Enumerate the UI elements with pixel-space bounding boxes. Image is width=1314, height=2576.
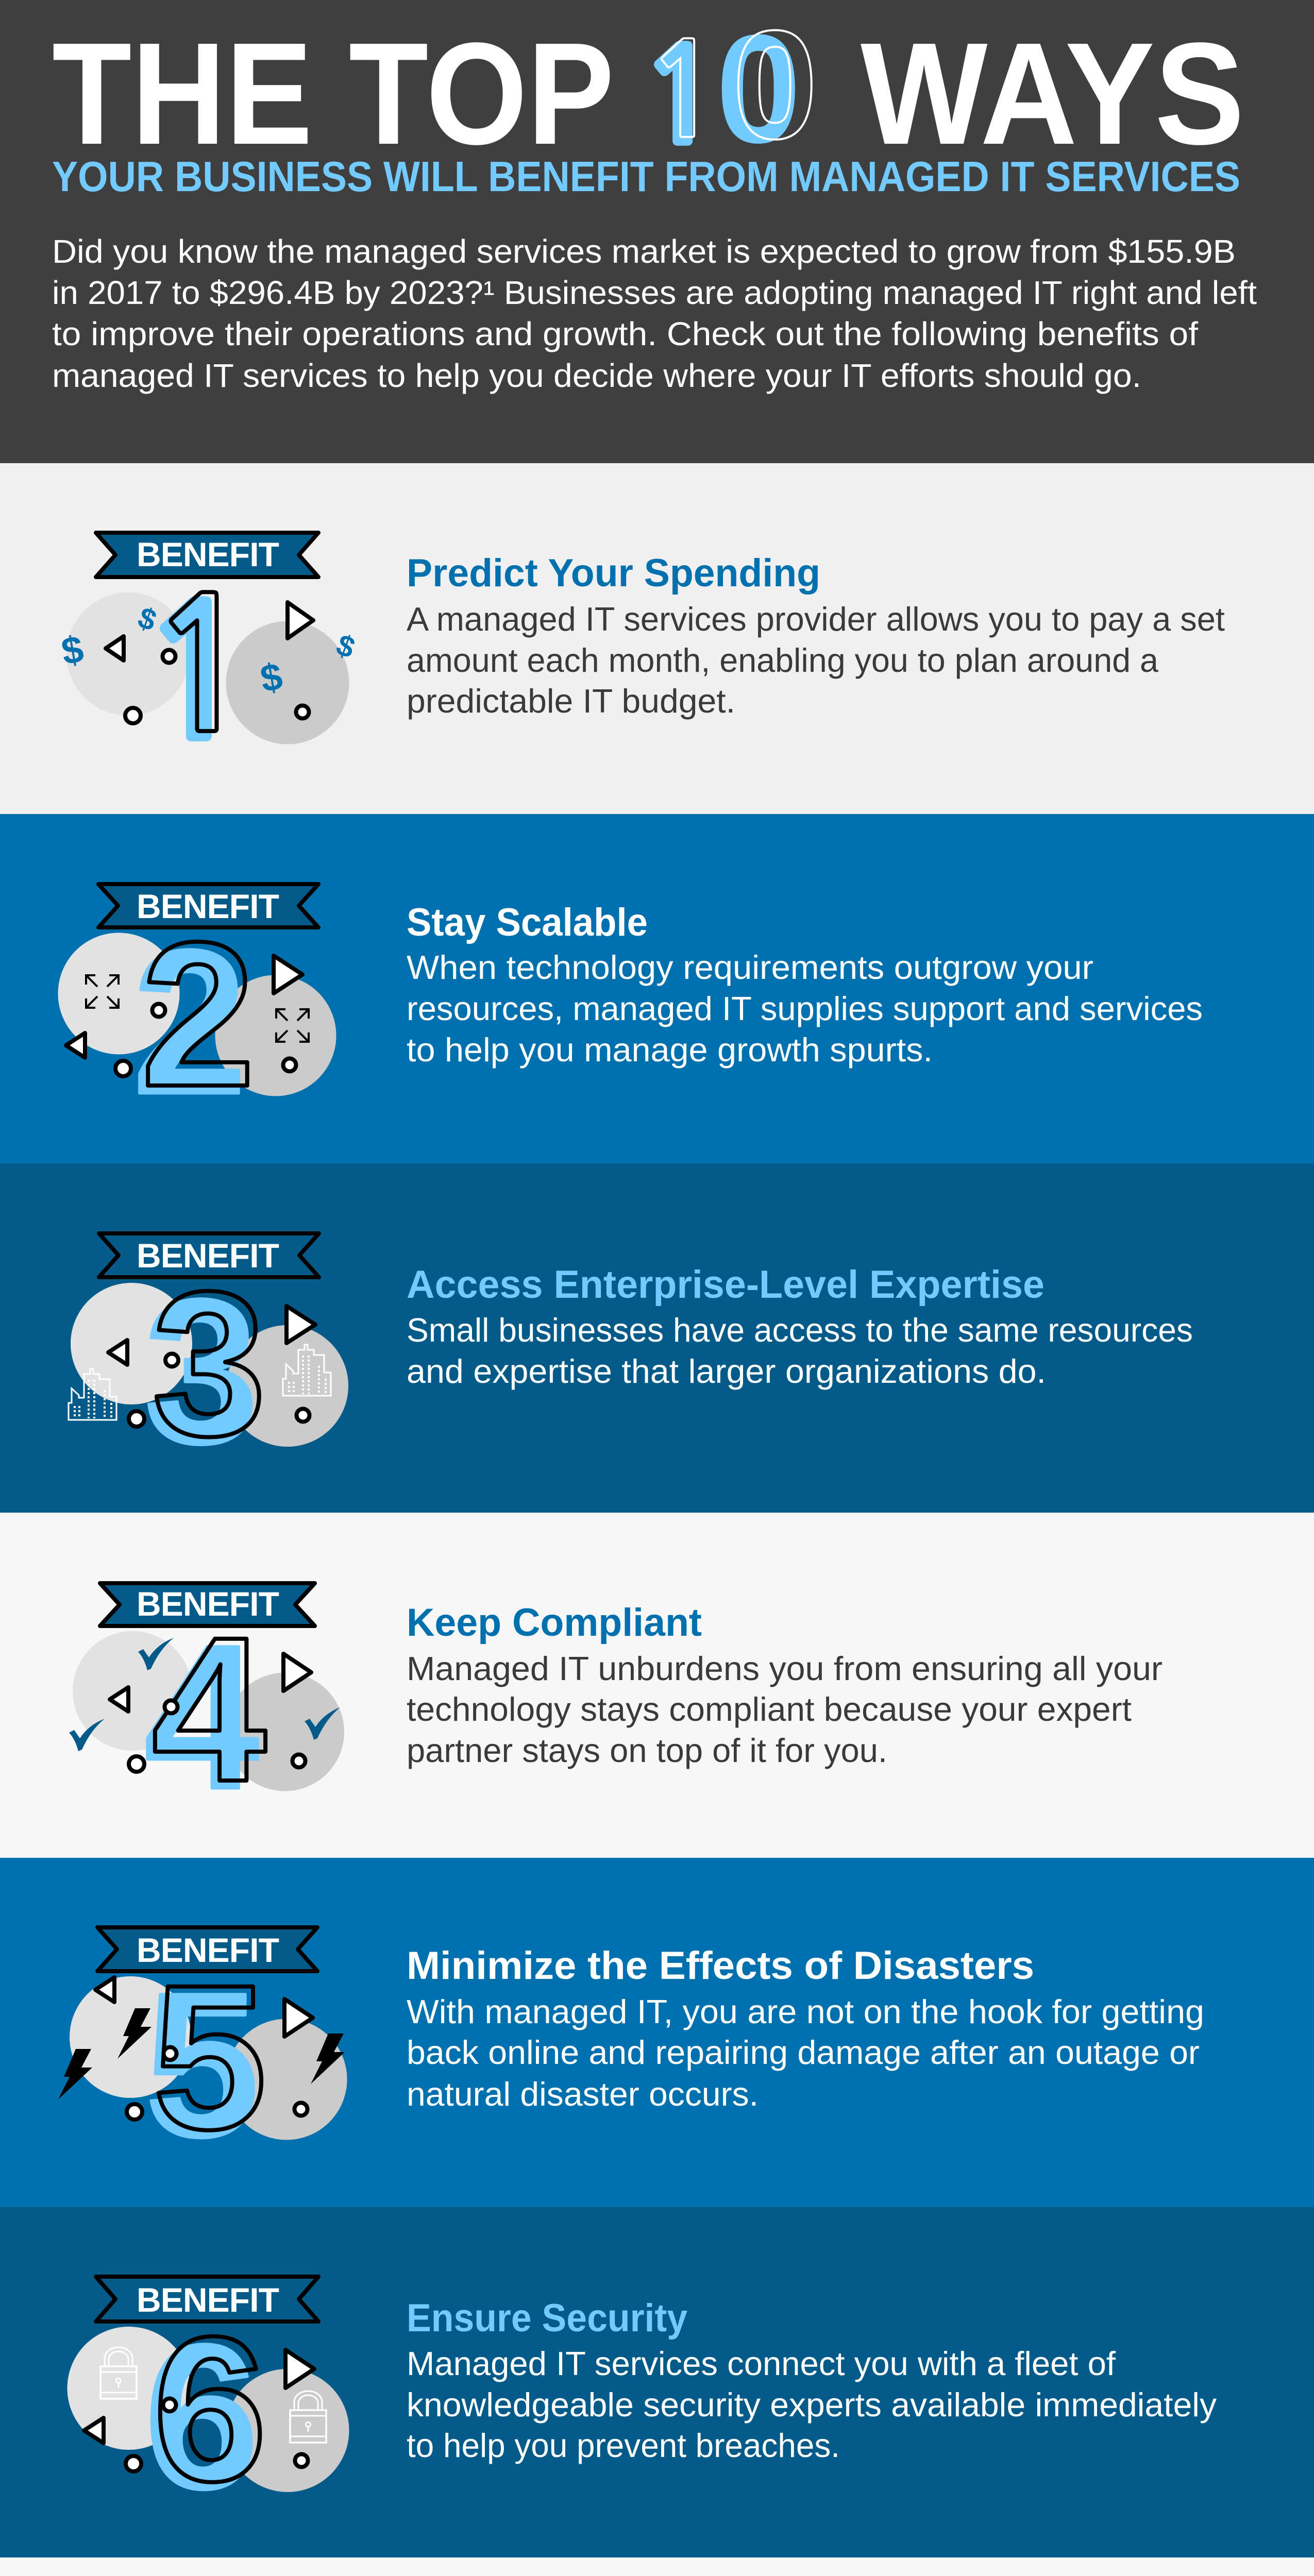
banner: [97, 1927, 317, 1971]
panel: benefit 6: [0, 2207, 1314, 2557]
icon: expand arrows: [86, 975, 309, 1042]
panel: benefit 7: [0, 2557, 1314, 2576]
title: 0: [732, 0, 818, 171]
banner: [100, 1583, 315, 1626]
banner: BENEFIT: [137, 535, 279, 573]
numeral 1: 1: [139, 584, 250, 765]
intro paragraph: [52, 233, 1257, 394]
banner: [98, 884, 318, 927]
body text: [407, 1650, 1163, 1769]
body text: Managed IT services connect you with a fleet of: [407, 2345, 1116, 2382]
intro paragraph: in 2017 to $296.4B by 2023?¹ Businesses are adopting managed IT right and left: [52, 274, 1257, 311]
panel: benefit 5: [0, 1858, 1314, 2207]
icon: dollar signs: [58, 601, 359, 700]
title: THE TOP: [52, 12, 614, 175]
body text: resources, managed IT supplies support and services: [407, 990, 1203, 1027]
intro paragraph: to improve their operations and growth. Check out the following benefits of: [52, 315, 1198, 352]
numeral 3: 3: [144, 1256, 259, 1486]
body text: [407, 2345, 1217, 2464]
panel: benefit 1: [0, 463, 1314, 814]
body text: [407, 948, 1203, 1069]
panel: benefit 2: [0, 814, 1314, 1163]
numeral 6: 6: [144, 2301, 259, 2532]
intro paragraph: managed IT services to help you decide where your IT efforts should go.: [52, 357, 1141, 394]
icon: dollar signs: $: [133, 601, 161, 638]
icon: dollar signs: $: [332, 628, 359, 665]
body text: With managed IT, you are not on the hook for getting: [407, 1993, 1204, 2030]
heading: Keep Compliant: [407, 1601, 702, 1645]
heading: Access Enterprise-Level Expertise: [407, 1263, 1045, 1307]
heading: Minimize the Effects of Disasters: [407, 1944, 1034, 1988]
arrow markers: [95, 1977, 313, 2120]
arrow markers: [66, 956, 302, 1076]
heading: Predict Your Spending: [407, 551, 820, 595]
banner: BENEFIT: [137, 1585, 279, 1623]
numeral 4: 4: [152, 1594, 268, 1824]
numeral 1: 1: [147, 577, 258, 758]
icon: lightning bolts: [58, 2008, 345, 2099]
intro paragraph: Did you know the managed services market is expected to grow from $155.9B: [52, 233, 1236, 270]
numeral 6: 6: [153, 2294, 267, 2524]
body text: knowledgeable security experts available immediately: [407, 2386, 1217, 2424]
numeral 4: 4: [144, 1602, 260, 1832]
body text: natural disaster occurs.: [407, 2075, 759, 2113]
illustration: benefit 3: [69, 1233, 348, 1486]
body text: amount each month, enabling you to plan around a: [407, 641, 1159, 679]
numeral 5: 5: [145, 1950, 259, 2180]
body text: [407, 1311, 1193, 1390]
arrow markers: [106, 602, 313, 723]
panel: benefit 3: [0, 1163, 1314, 1513]
illustration: benefit 5: [58, 1927, 347, 2180]
body text: When technology requirements outgrow your: [407, 948, 1093, 986]
banner: BENEFIT: [137, 1931, 279, 1969]
banner: [99, 1233, 319, 1277]
heading: Ensure Security: [407, 2296, 687, 2340]
title: [52, 0, 1244, 175]
icon: padlocks: [100, 2347, 326, 2443]
banner: [96, 533, 318, 577]
title: 1: [645, 27, 723, 156]
heading: Stay Scalable: [407, 901, 648, 944]
title: WAYS: [861, 12, 1244, 175]
banner: BENEFIT: [137, 2281, 279, 2319]
title: 1: [641, 33, 719, 162]
arrow markers: [108, 1306, 315, 1427]
body text: and expertise that larger organizations do.: [407, 1352, 1046, 1390]
numeral 2: 2: [132, 907, 247, 1137]
body text: to help you prevent breaches.: [407, 2427, 840, 2464]
banner: [96, 2277, 318, 2321]
body text: A managed IT services provider allows you to pay a set: [407, 600, 1225, 638]
numeral 5: 5: [153, 1942, 267, 2172]
numeral 3: 3: [152, 1248, 266, 1479]
illustration: benefit 2: [58, 884, 336, 1137]
panel: header: [0, 0, 1314, 463]
banner: BENEFIT: [137, 887, 279, 925]
title: 0: [716, 2, 801, 175]
body text: predictable IT budget.: [407, 682, 735, 720]
body text: to help you manage growth spurts.: [407, 1031, 933, 1069]
body text: Small businesses have access to the same resources: [407, 1311, 1193, 1349]
illustration: benefit 1: [58, 533, 359, 765]
body text: [407, 600, 1225, 720]
arrow markers: [110, 1654, 311, 1772]
panel: benefit 4: [0, 1513, 1314, 1858]
banner: BENEFIT: [137, 1236, 279, 1275]
icon: check marks: [69, 1638, 340, 1751]
illustration: benefit 4: [69, 1583, 344, 1832]
icon: dollar signs: $: [58, 627, 87, 673]
icon: city buildings: [69, 1345, 331, 1420]
illustration: benefit 6: [67, 2277, 349, 2532]
icon: dollar signs: $: [257, 654, 285, 700]
body text: [407, 1993, 1204, 2113]
body text: partner stays on top of it for you.: [407, 1732, 887, 1769]
numeral 2: 2: [141, 899, 256, 1129]
arrow markers: [84, 2350, 314, 2471]
body text: technology stays compliant because your expert: [407, 1690, 1132, 1728]
body text: back online and repairing damage after an outage or: [407, 2033, 1200, 2071]
body text: Managed IT unburdens you from ensuring all your: [407, 1650, 1163, 1687]
